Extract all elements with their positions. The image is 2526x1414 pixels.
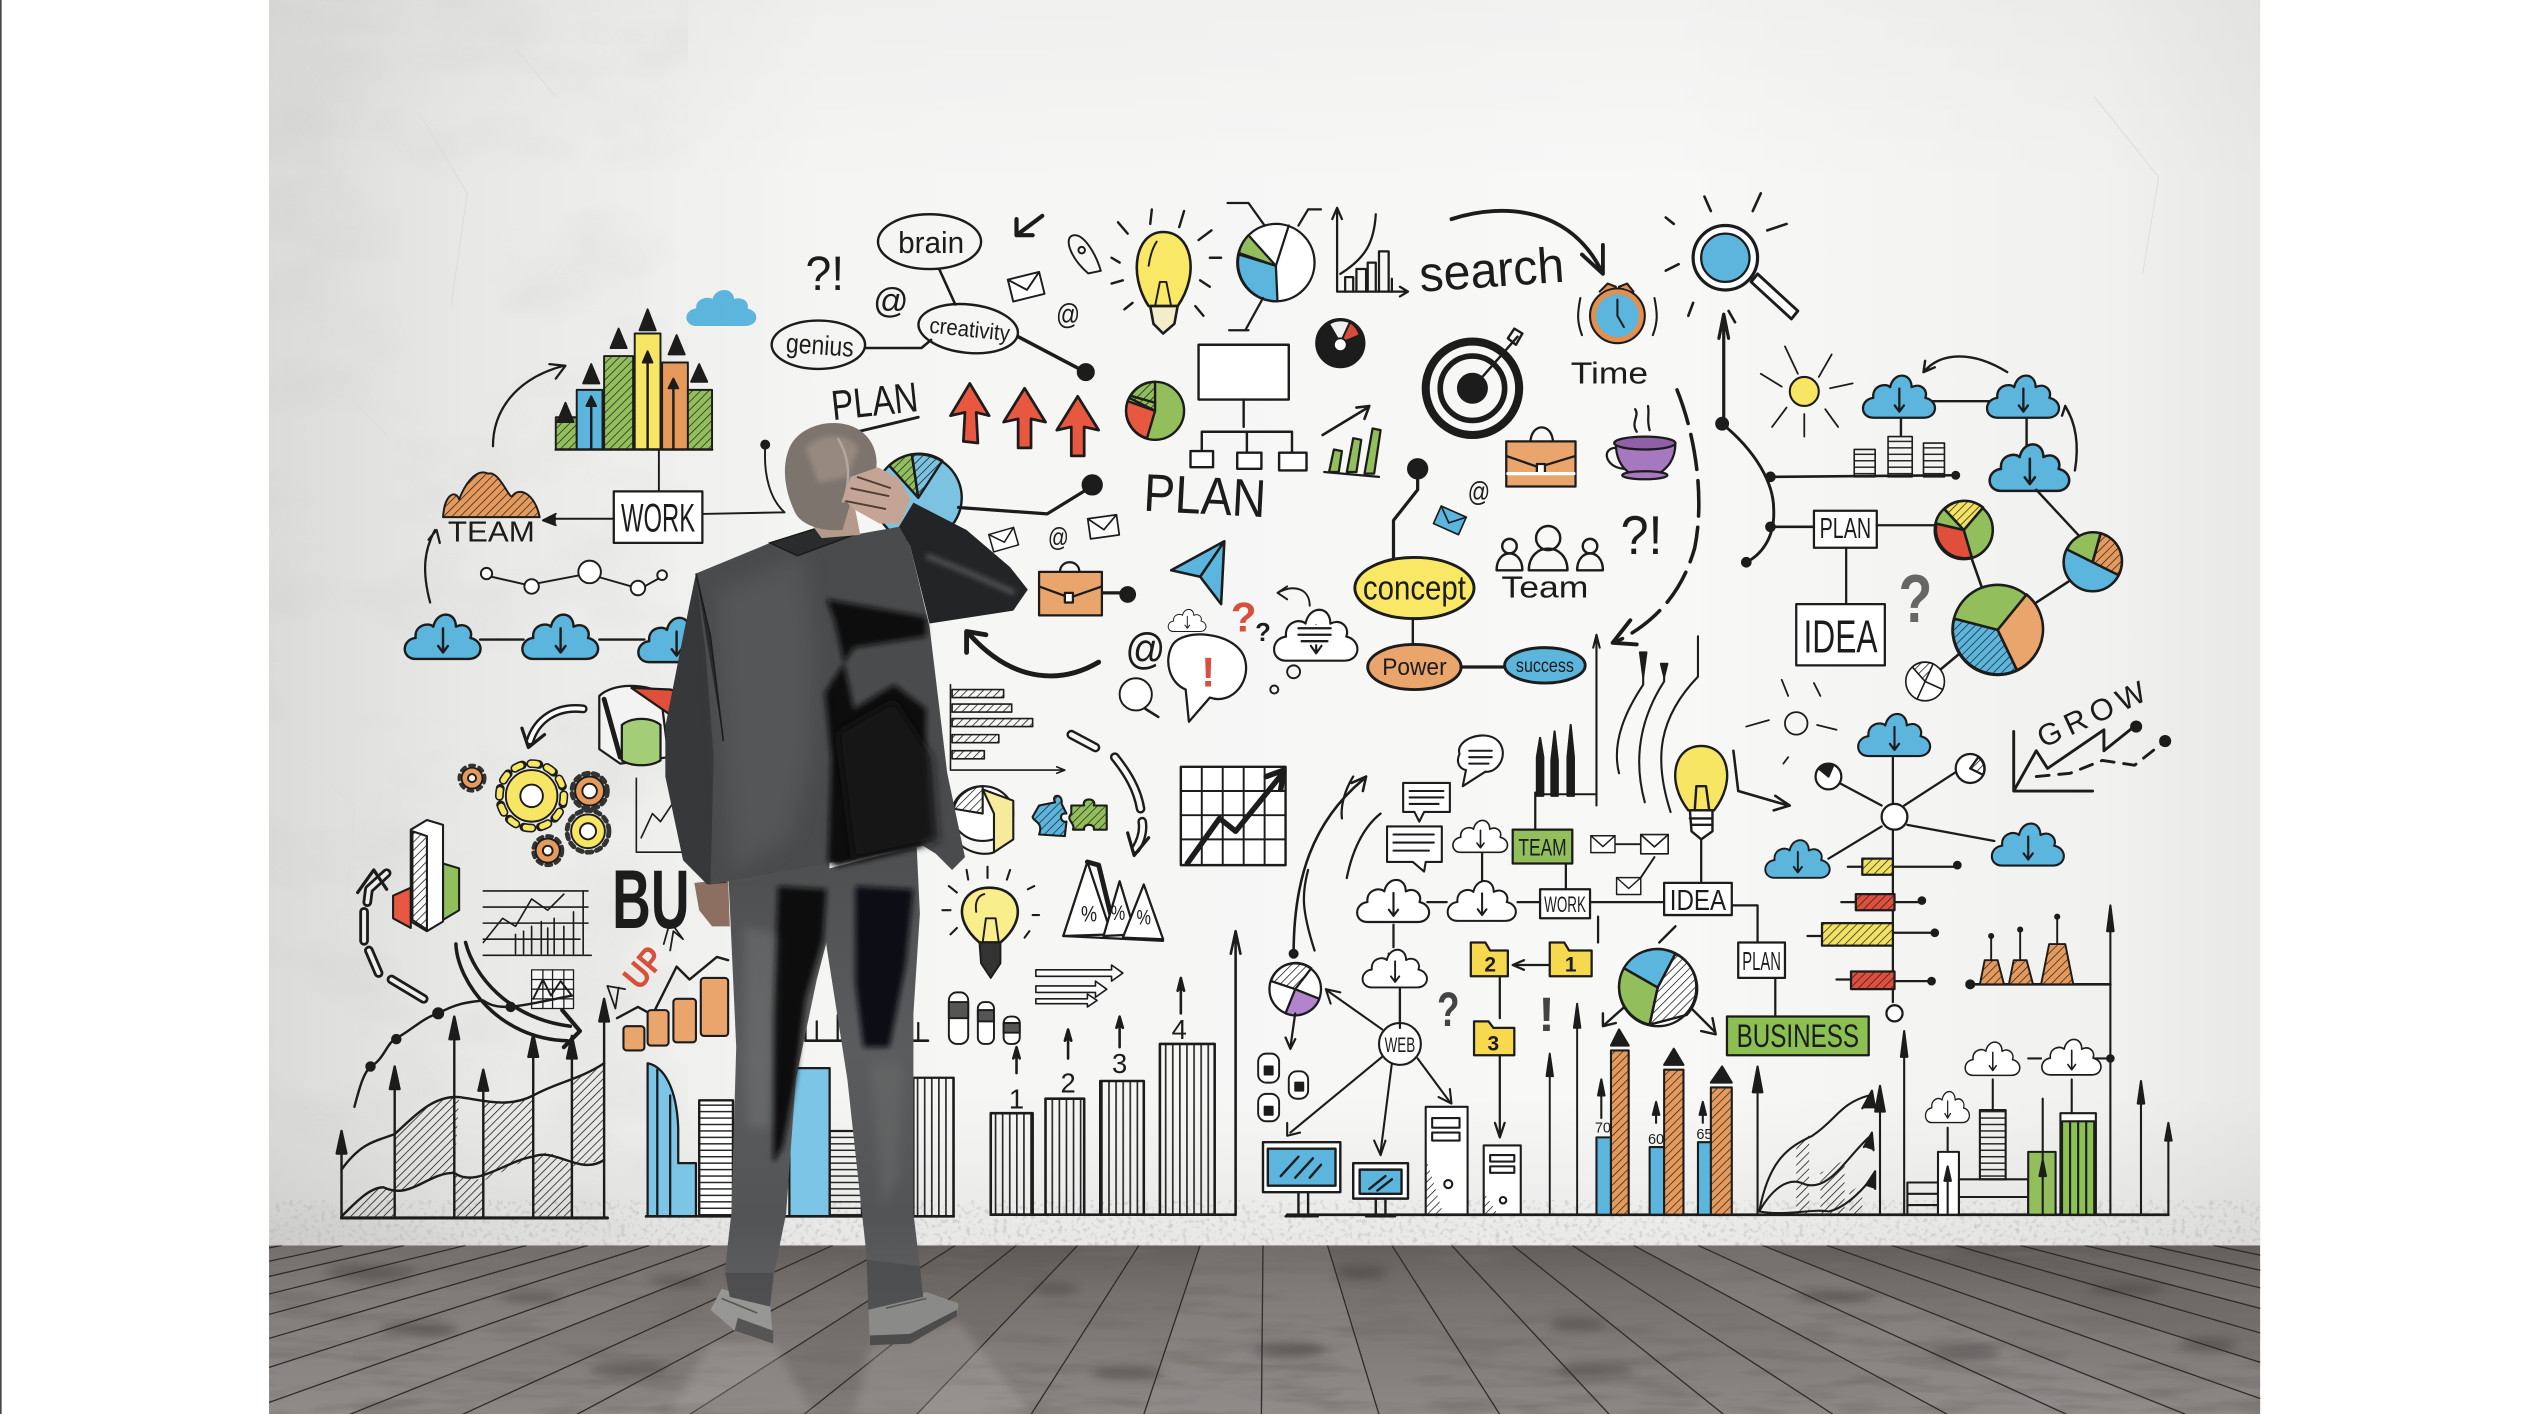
table chart sketch: [483, 891, 591, 955]
Time label: Time: [1571, 356, 1648, 390]
mind map: brain, creativity, genius: creativity: [928, 313, 1012, 346]
curved ring arrow left: [358, 870, 424, 999]
TEAM WORK IDEA PLAN BUSINESS boxes: BUSINESS: [1737, 1018, 1859, 1054]
sketches: upper left cluster: [405, 209, 1306, 722]
symbols: question and exclamation lower: ?: [1437, 983, 1460, 1037]
percent triangles chart: %: [1137, 907, 1151, 930]
hand on head: [844, 467, 910, 524]
big PLAN label: PLAN: [1142, 464, 1268, 529]
symbols: question marks and at signs: ?!: [805, 247, 844, 301]
arrow: arc to alarm clock: [1451, 211, 1603, 274]
concept mind map: [1355, 459, 1585, 690]
server towers: [1426, 1107, 1521, 1215]
speech bubbles: [1387, 735, 1503, 872]
symbols and cloud bubble cluster: !: [1201, 648, 1215, 695]
TEAM WORK IDEA PLAN BUSINESS boxes: TEAM: [1518, 834, 1567, 861]
cloud tree: three blue clouds with coins: [1854, 356, 2078, 535]
arrow: curve up to TEAM: [425, 530, 440, 603]
icon: blue paper plane: [1171, 541, 1224, 604]
sketches: lower right cluster: [1258, 635, 2172, 1216]
connector to black dot: [959, 488, 1089, 514]
symbols: question marks and at signs: [805, 247, 1080, 331]
symbols: question and exclamation lower: !: [1538, 988, 1555, 1042]
arrow: long curve from pie up to grid: [1294, 777, 1366, 954]
branching trunk with nodes: [1716, 418, 1959, 566]
dot: long curve end: [1290, 950, 1298, 958]
pie behind the hand: [875, 454, 962, 541]
3D pie and green cylinder behind the man: [599, 686, 722, 765]
team icon with label: Team: [1501, 571, 1588, 605]
icon: three red arrows: [950, 383, 1099, 456]
three small arrows: [1036, 965, 1123, 1007]
pie network: [1906, 501, 2122, 701]
icon: alarm clock: [1578, 284, 1657, 343]
vertical arrows: [1547, 1004, 1580, 1215]
PLAN and IDEA boxes: PLAN: [1820, 513, 1871, 545]
grid chart with rising arrow: [1181, 767, 1286, 865]
percent triangles chart: %: [1111, 902, 1125, 925]
arrow: large curved pointing at man: [967, 632, 1099, 676]
icons: three locks: [1258, 1054, 1308, 1121]
symbols: question and exclamation: ?!: [1621, 504, 1663, 566]
arrow: from dot to network: [1733, 751, 1790, 810]
PLAN and IDEA boxes: [1796, 511, 1935, 665]
arrow: up to magnifier: [1719, 314, 1729, 424]
icon: map pin: [1067, 231, 1101, 276]
wooden floor: [269, 1245, 2260, 1414]
central pie with arrows: [1603, 926, 1716, 1034]
WORK box: WORK: [621, 496, 695, 541]
bar chart numbered one to four: 2: [1060, 1067, 1076, 1098]
org chart diagram: [1191, 345, 1306, 470]
UP arrow label: UP: [615, 939, 673, 997]
envelopes and at sign: [989, 515, 1119, 552]
icon: target with dart: [1426, 329, 1522, 435]
skin: lower left hand: [694, 880, 730, 926]
symbols: question and exclamation lower: [1437, 983, 1555, 1042]
pie chart with brackets: [1228, 203, 1321, 330]
yellow folders: 2: [1484, 953, 1496, 976]
arrow: large curved outline: [456, 942, 570, 1041]
ring of arrow segments right: [1071, 735, 1149, 855]
mind map: brain, creativity, genius: [772, 214, 1094, 380]
sketches: lower left cluster: [337, 685, 1286, 1218]
arrow: curved outline top: [522, 708, 583, 748]
bar chart numbered one to four: 4: [1172, 1014, 1187, 1045]
trend line and orange cylinders: [617, 957, 728, 1050]
thought cloud and small bubbles: [1270, 586, 1357, 694]
icon: yellow light bulb: [1112, 209, 1221, 333]
TEAM label with orange hatched hills: TEAM: [448, 516, 535, 548]
pie: small green red hatched: [1126, 382, 1184, 440]
small grid chart: [532, 970, 574, 1009]
icon: dark disc: [1316, 319, 1364, 367]
TEAM WORK IDEA PLAN BUSINESS boxes: IDEA: [1670, 885, 1727, 917]
computer monitors: [1263, 1142, 1408, 1216]
symbols: question marks and at signs: @: [873, 281, 909, 321]
small sun sketch: [1746, 680, 1837, 764]
shoes: [710, 1289, 959, 1345]
cloud: blue top: [687, 291, 755, 325]
web hub with arrows: [1287, 988, 1451, 1155]
mind map: brain, creativity, genius: brain: [898, 226, 964, 260]
concept mind map: success: [1516, 656, 1574, 677]
baseline: [1287, 1214, 2168, 1216]
arrow: curve to bar chart: [493, 364, 565, 446]
blue and orange pencil bars: 65: [1696, 1127, 1712, 1143]
chart: small bars with axis: [1332, 208, 1408, 296]
GROW chart: GROW: [2032, 675, 2151, 755]
PLAN and IDEA boxes: IDEA: [1803, 610, 1878, 662]
blue cloud row: [405, 615, 714, 662]
arrow: dashed arc: [1617, 390, 1699, 641]
chart: rising coloured bars: [556, 309, 712, 449]
spire chart and arcs: [1537, 635, 1698, 812]
icon: orange briefcase with connector: [1039, 562, 1135, 615]
TEAM label with orange hatched hills: [443, 472, 540, 548]
white cloud network: [1304, 777, 1540, 1028]
light bulb three: [1675, 746, 1727, 839]
bar chart numbered one to four: 1: [1009, 1083, 1024, 1114]
hub network with bars: [1765, 714, 2064, 1021]
jacket: [665, 503, 1028, 884]
TEAM WORK IDEA PLAN BUSINESS boxes: WORK: [1544, 892, 1586, 917]
3D pie and puzzle pieces: [952, 786, 1107, 854]
WORK box: [543, 441, 785, 543]
floor reflection: [669, 1321, 1031, 1414]
yellow folders: [1471, 942, 1592, 1137]
arrow head: dashed arc end: [1613, 620, 1637, 644]
line chart nodes: [481, 561, 667, 595]
blue and orange pencil bars: 70: [1595, 1121, 1611, 1137]
yellow folders: 3: [1488, 1032, 1499, 1055]
blue and orange pencil bars: 60: [1648, 1132, 1664, 1148]
yellow folders: 1: [1565, 953, 1577, 976]
icon: sun: [1761, 346, 1853, 437]
arrow: small black down-left: [1017, 216, 1042, 235]
at sign and blue envelope: [1433, 476, 1490, 535]
page left edge line: [0, 0, 2, 1414]
at sign and blue envelope: @: [1468, 476, 1490, 507]
hatched question mark: ?: [1899, 562, 1932, 637]
hatched curve chart: [1753, 1067, 1885, 1215]
icon: purple cup: [1607, 406, 1675, 479]
symbols and cloud bubble cluster: @: [1125, 626, 1166, 674]
GROW chart: [2014, 675, 2170, 791]
concept mind map: concept: [1363, 569, 1467, 607]
sketches: upper right cluster: [1228, 193, 2122, 701]
horizontal progress bars: [950, 685, 1065, 773]
light bulb two: [942, 867, 1039, 978]
envelopes and at sign: @: [1048, 524, 1069, 552]
symbols and cloud bubble cluster: [1120, 594, 1271, 722]
factory chimneys: [1966, 915, 2110, 988]
man standing with hand on head: [665, 423, 1031, 1414]
symbols and cloud bubble cluster: ?: [1255, 619, 1271, 647]
icon: arrow with green bars: [1323, 406, 1381, 477]
3D bars: [393, 820, 459, 931]
gears: [459, 764, 609, 865]
dot: connector end: [1083, 475, 1102, 495]
small line chart: [636, 778, 681, 852]
UP arrow label: [607, 922, 683, 1009]
web hub with arrows: WEB: [1385, 1034, 1415, 1057]
bar chart numbered one to four: 3: [1112, 1048, 1127, 1079]
small cylinders: [949, 992, 1020, 1044]
TEAM WORK IDEA PLAN BUSINESS boxes: PLAN: [1742, 948, 1781, 976]
symbols: question marks and at signs: @: [1056, 299, 1080, 331]
percent triangles chart: [1063, 862, 1163, 941]
concept mind map: Power: [1382, 654, 1447, 681]
wall background: [269, 0, 2260, 1245]
arrow head: large curved outline: [562, 1010, 580, 1047]
search heading: search: [1417, 237, 1566, 303]
symbols and cloud bubble cluster: ?: [1231, 594, 1256, 641]
bar chart numbered one to four: [991, 931, 1240, 1215]
skyline buildings: [646, 999, 954, 1216]
mind map: brain, creativity, genius: genius: [785, 327, 855, 363]
head: [785, 423, 877, 538]
icon: envelope tilted: [1008, 272, 1045, 302]
BU letters: BU: [612, 852, 689, 946]
PLAN heading with underline: PLAN: [829, 373, 920, 429]
area line chart: [337, 996, 609, 1218]
trousers: [725, 846, 923, 1310]
icon: magnifying glass: [1666, 193, 1798, 322]
right side skyline with clouds: [1901, 905, 2172, 1215]
icon: orange briefcase: [1506, 427, 1576, 487]
blue and orange pencil bars: [1595, 1029, 1732, 1215]
pie: purple: [1269, 963, 1321, 1049]
TEAM WORK IDEA PLAN BUSINESS boxes: [1513, 793, 1869, 1055]
envelopes group: [1591, 835, 1668, 895]
team icon with label: [1497, 526, 1603, 605]
percent triangles chart: %: [1081, 902, 1097, 927]
